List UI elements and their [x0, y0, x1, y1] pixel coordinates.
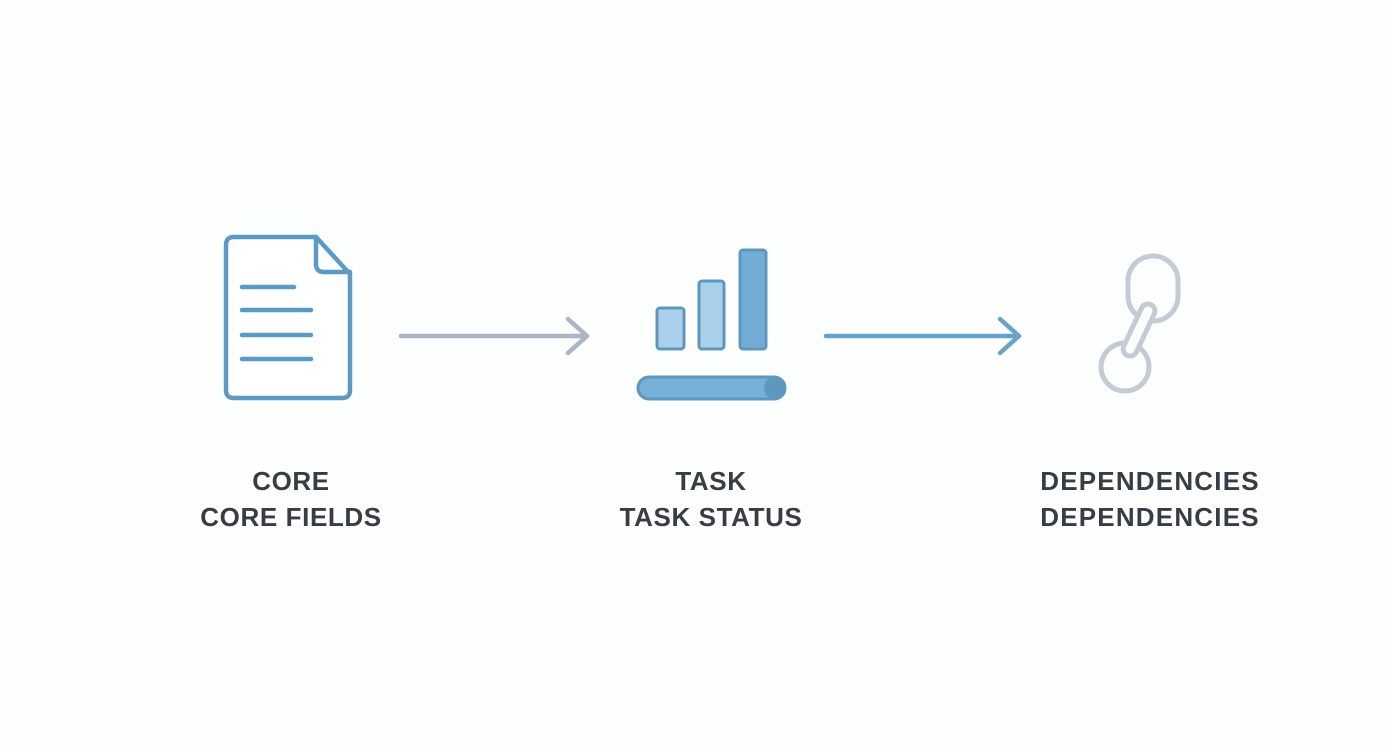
icon: bar chart	[638, 250, 785, 399]
label: task status: TASK STATUS	[620, 502, 802, 532]
icon: chain link	[1101, 256, 1178, 391]
arrow: task to dependencies	[826, 319, 1019, 353]
label: dependencies: DEPENDENCIES	[1040, 502, 1260, 532]
label: dependencies: DEPENDENCIES	[1040, 466, 1260, 496]
icon: document	[226, 237, 350, 398]
label: task status	[620, 466, 802, 532]
arrow: core to task	[401, 319, 587, 353]
label: dependencies	[1040, 466, 1260, 532]
label: core fields	[200, 466, 382, 532]
label: task status: TASK	[675, 466, 747, 496]
label: core fields: CORE	[252, 466, 330, 496]
label: core fields: CORE FIELDS	[200, 502, 382, 532]
